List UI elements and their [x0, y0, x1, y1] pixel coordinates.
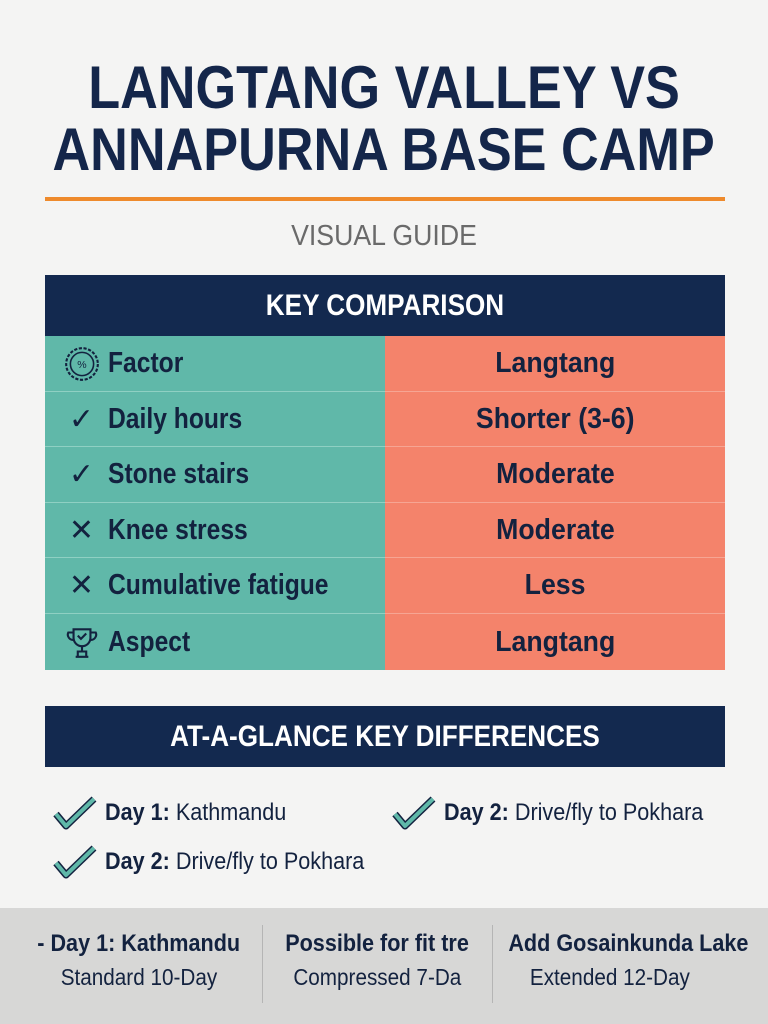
- check item 2: [392, 796, 704, 830]
- row: stone stairs: Moderate: [496, 458, 614, 490]
- row: cumulative fatigue: Less: [525, 569, 585, 601]
- row: stone stairs: Stone stairs: [108, 458, 249, 490]
- section header: at-a-glance: AT-A-GLANCE KEY DIFFERENCES: [170, 720, 600, 753]
- footer column 2: Possible for fit tre: [285, 930, 469, 957]
- subtitle: VISUAL GUIDE: [291, 220, 477, 252]
- check item 1: Day 1: Kathmandu: [105, 799, 286, 826]
- check item 2: Day 2: Drive/fly to Pokhara: [444, 799, 703, 826]
- footer column 1: - Day 1: Kathmandu: [38, 930, 240, 957]
- footer column 2: Compressed 7-Da: [293, 964, 461, 990]
- footer column 1: Standard 10-Day: [61, 964, 217, 990]
- footer column 2: [285, 930, 469, 990]
- row: aspect: Langtang: [495, 626, 615, 658]
- row: stone stairs: [45, 447, 725, 503]
- row: daily hours: ✓: [69, 402, 94, 436]
- check item 1: [53, 796, 286, 830]
- row: daily hours: [45, 392, 725, 447]
- title: LANGTANG VALLEY VS: [88, 54, 680, 121]
- row: aspect: Aspect: [108, 626, 190, 658]
- footer column 3: Add Gosainkunda Lake: [508, 930, 748, 957]
- table header: key comparison: [45, 275, 725, 336]
- row: factor: Factor: [108, 347, 183, 379]
- check item 3: [53, 846, 364, 878]
- footer column 3: Extended 12-Day: [530, 964, 690, 990]
- comparison table: [45, 336, 725, 670]
- row: factor: %: [77, 359, 86, 371]
- row: cumulative fatigue: [45, 558, 725, 614]
- section header: at-a-glance: [45, 706, 725, 767]
- footer band: [0, 908, 768, 1024]
- row: cumulative fatigue: Cumulative fatigue: [108, 569, 329, 601]
- row: factor: Langtang: [495, 347, 615, 379]
- table header: key comparison: KEY COMPARISON: [266, 289, 504, 322]
- row: factor: [45, 336, 725, 392]
- row: knee stress: Knee stress: [108, 514, 248, 546]
- row: stone stairs: ✓: [69, 458, 94, 491]
- title: [53, 54, 715, 183]
- row: cumulative fatigue: ✕: [69, 569, 94, 602]
- row: knee stress: [45, 503, 725, 558]
- row: aspect: [45, 614, 725, 670]
- row: daily hours: Daily hours: [108, 402, 242, 434]
- title: ANNAPURNA BASE CAMP: [53, 116, 715, 183]
- row: knee stress: Moderate: [496, 514, 614, 546]
- row: knee stress: ✕: [69, 514, 94, 546]
- footer column 3: [508, 930, 748, 990]
- row: daily hours: Shorter (3-6): [476, 402, 634, 434]
- footer column 1: [38, 930, 240, 990]
- check item 3: Day 2: Drive/fly to Pokhara: [105, 848, 364, 875]
